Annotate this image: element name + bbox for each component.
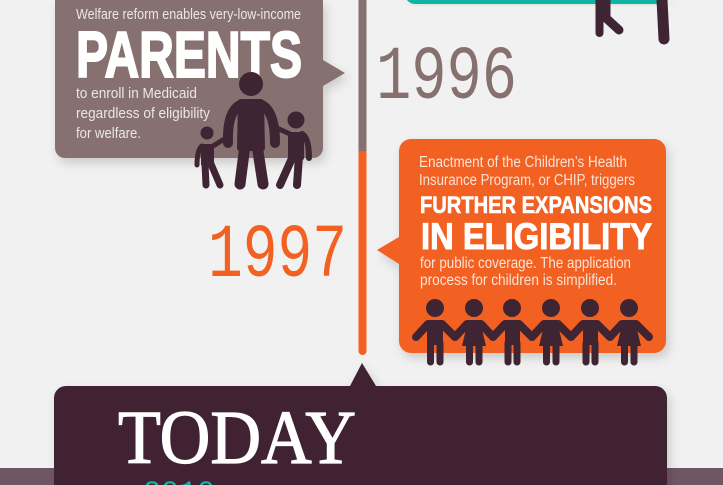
panel: today	[54, 363, 667, 485]
text: public coverage: process for children is simplified.	[420, 272, 617, 289]
icon: six children holding hands	[416, 299, 649, 362]
timeline	[358, 0, 366, 355]
text: medicaid enrollment: regardless of eligibility	[76, 105, 210, 122]
text: medicaid enrollment: to enroll in Medicaid	[76, 85, 197, 102]
year: 1996: 1996	[376, 35, 517, 121]
panel: 1996 parents callout	[55, 0, 345, 185]
panel: teal 1995 callout fragment	[405, 0, 670, 39]
text: CHIP intro: Insurance Program, or CHIP, triggers	[419, 172, 635, 189]
panel: 1997 CHIP callout	[377, 139, 666, 362]
text: welfare reform intro: Welfare reform enables very-low-income	[76, 6, 301, 23]
text: medicaid enrollment	[76, 85, 210, 142]
text: medicaid enrollment: for welfare.	[76, 125, 141, 142]
text: CHIP intro: Enactment of the Children’s Health	[419, 154, 627, 171]
icon: figure legs	[600, 0, 664, 39]
heading: parents: PARENTS	[76, 18, 302, 91]
heading: in eligibility: IN ELIGIBILITY	[421, 216, 652, 257]
text: public coverage	[420, 255, 631, 289]
text: public coverage: for public coverage. The application	[420, 255, 631, 272]
icon: parent with two children	[197, 72, 309, 185]
heading: further expansions: FURTHER EXPANSIONS	[420, 192, 652, 219]
text: CHIP intro	[419, 154, 635, 189]
year: 1997: 1997	[208, 213, 347, 299]
heading: today: TODAY	[118, 396, 356, 480]
